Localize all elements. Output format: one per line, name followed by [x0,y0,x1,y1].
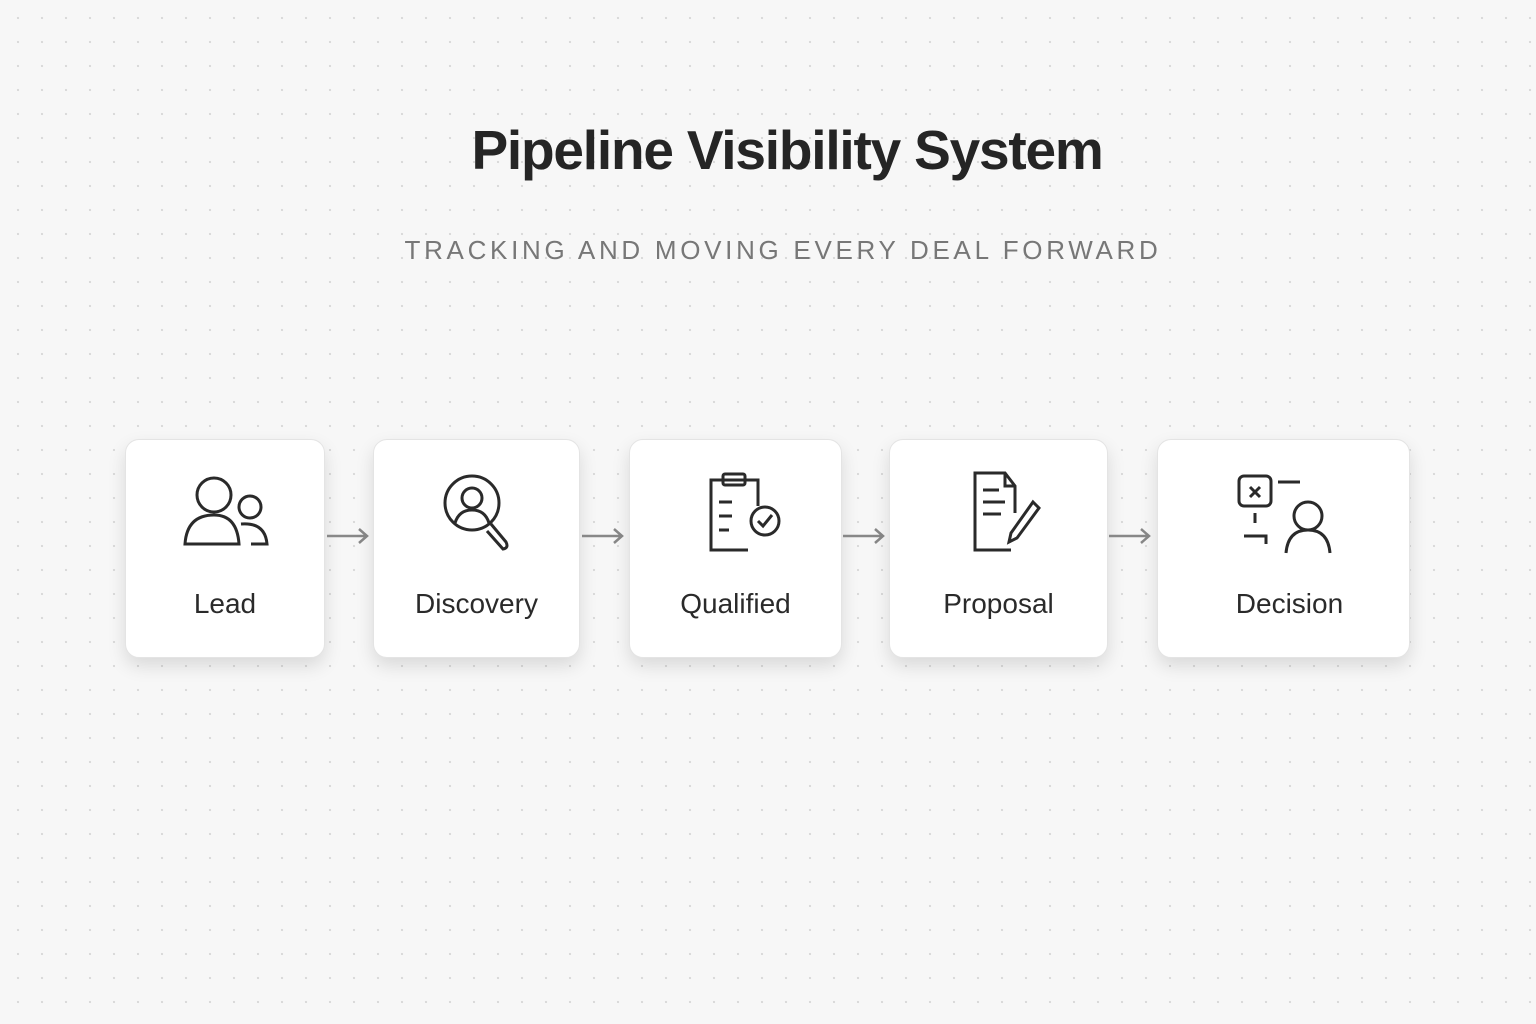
icon: clipboard check [710,472,780,552]
icon: document pencil [974,472,1041,552]
label: Lead [194,588,256,619]
icon: decision person [1238,474,1332,554]
arrow [843,528,885,544]
label: Proposal [943,588,1054,619]
label: Decision [1236,588,1343,619]
arrow [582,528,624,544]
label: Discovery [415,588,538,619]
card: Qualified [629,439,842,658]
card: Lead [125,439,325,658]
arrow [327,528,369,544]
card: Proposal [889,439,1108,658]
card: Discovery [373,439,580,658]
arrow [1109,528,1151,544]
subtitle: TRACKING AND MOVING EVERY DEAL FORWARD [404,235,1162,265]
label: Qualified [680,588,791,619]
icon: people [183,476,269,546]
title: Pipeline Visibility System [471,119,1103,181]
card: Decision [1157,439,1410,658]
icon: search person [444,474,508,551]
